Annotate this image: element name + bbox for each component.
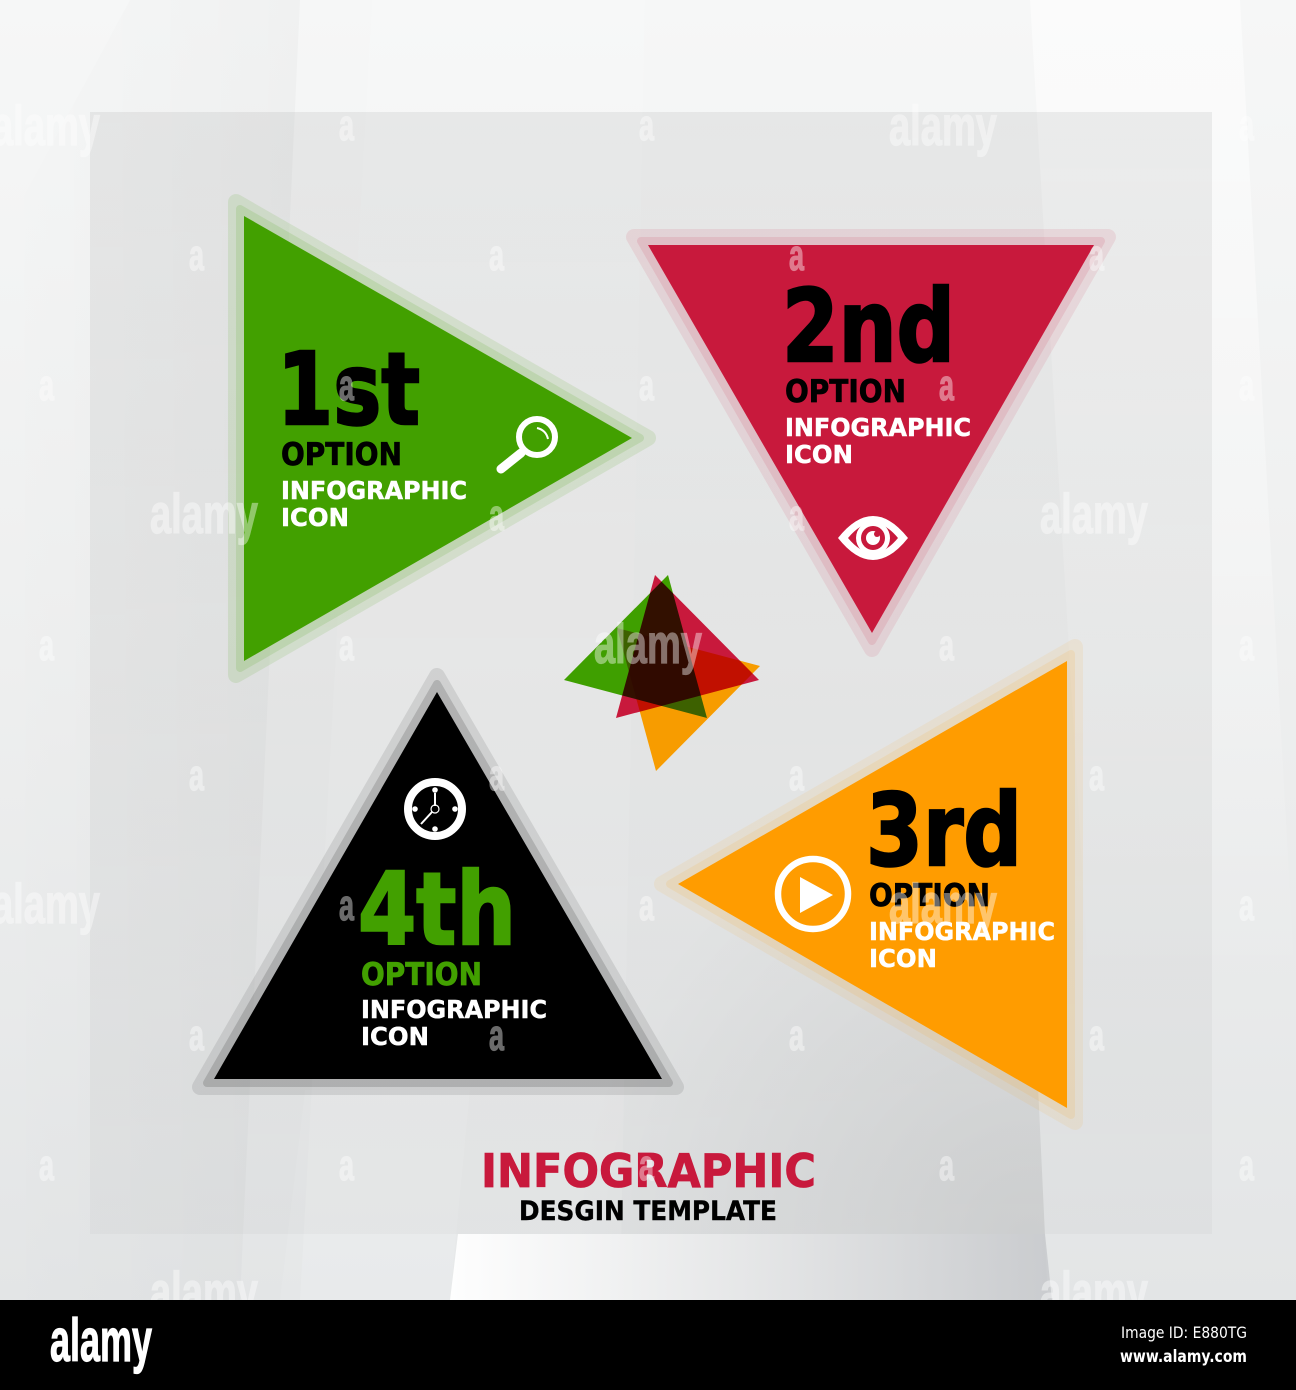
watermark text: a [489, 751, 504, 800]
watermark text: a [339, 881, 354, 930]
watermark text: alamy [1040, 482, 1148, 545]
watermark text: a [1239, 361, 1254, 410]
watermark text: a [489, 491, 504, 540]
center overlapping triangles [564, 575, 760, 771]
caption: infographic icon: ICON [361, 1022, 429, 1051]
number: 1st: 1st [277, 331, 420, 448]
panel: 3rd option orange triangle [662, 647, 1075, 1122]
watermark text: a [489, 1011, 504, 1060]
icon: eye [838, 516, 908, 560]
watermark text: a [339, 1141, 354, 1190]
watermark text: a [939, 361, 954, 410]
label: option: OPTION [361, 957, 482, 993]
caption: infographic icon: ICON [281, 503, 349, 532]
watermark text: a [939, 1141, 954, 1190]
watermark text: alamy [150, 482, 258, 545]
watermark text: a [939, 621, 954, 670]
watermark text: alamy [150, 1260, 258, 1323]
caption: infographic icon: ICON [869, 944, 937, 973]
watermark text: a [339, 621, 354, 670]
caption: infographic icon: INFOGRAPHIC [361, 995, 547, 1024]
watermark text: a [789, 231, 804, 280]
panel: 1st option green triangle [236, 202, 648, 675]
website: www.alamy.com [1120, 1347, 1247, 1367]
icon: play button [778, 859, 848, 929]
watermark text: alamy [889, 94, 997, 157]
image id: Image ID: E880TG [1121, 1323, 1247, 1342]
panel: 4th option black triangle [200, 676, 676, 1087]
watermark text: a [1239, 621, 1254, 670]
label: option: OPTION [869, 878, 990, 914]
watermark text: a [39, 621, 54, 670]
watermark text: a [339, 361, 354, 410]
caption: infographic icon [281, 476, 467, 532]
watermark text: a [1089, 1011, 1104, 1060]
watermark text: a [39, 1141, 54, 1190]
watermark text: alamy [594, 612, 702, 675]
watermark text: a [789, 1011, 804, 1060]
watermark text: a [639, 361, 654, 410]
black footer bar [0, 1300, 1296, 1390]
caption: infographic icon: INFOGRAPHIC [785, 413, 971, 442]
icon: clock [408, 782, 462, 836]
caption: infographic icon: INFOGRAPHIC [281, 476, 467, 505]
watermark text: a [489, 231, 504, 280]
footer logo: alamy [50, 1307, 152, 1374]
caption: infographic icon [785, 413, 971, 469]
title [481, 1144, 816, 1227]
watermark text: a [39, 361, 54, 410]
watermark text: a [1239, 1141, 1254, 1190]
watermark text: a [1239, 101, 1254, 150]
watermark text: a [789, 751, 804, 800]
watermark text: a [639, 1141, 654, 1190]
watermark text: a [639, 101, 654, 150]
number: 4th: 4th [358, 851, 516, 968]
label: option: OPTION [785, 374, 906, 410]
watermark text: a [1089, 751, 1104, 800]
watermark text: a [1089, 231, 1104, 280]
subtitle: DESGIN TEMPLATE [519, 1196, 777, 1227]
watermark text: alamy [889, 872, 997, 935]
number: 2nd: 2nd [782, 268, 955, 385]
watermark text: a [189, 751, 204, 800]
caption: infographic icon: ICON [785, 440, 853, 469]
icon: magnifier [501, 419, 555, 469]
watermark text: a [789, 491, 804, 540]
watermark text: a [339, 101, 354, 150]
watermark text: a [1239, 881, 1254, 930]
label: option: OPTION [281, 437, 402, 473]
watermark text: a [189, 1011, 204, 1060]
watermark text: a [189, 231, 204, 280]
panel: 2nd option red triangle [634, 237, 1108, 649]
watermark text: alamy [1040, 1260, 1148, 1323]
watermark text: a [639, 881, 654, 930]
caption: infographic icon: INFOGRAPHIC [869, 917, 1055, 946]
bottom highlight [450, 1234, 1052, 1300]
caption: infographic icon [361, 995, 547, 1051]
number: 3rd: 3rd [866, 772, 1022, 889]
caption: infographic icon [869, 917, 1055, 973]
title: INFOGRAPHIC [481, 1144, 816, 1198]
inner square panel [90, 112, 1212, 1234]
